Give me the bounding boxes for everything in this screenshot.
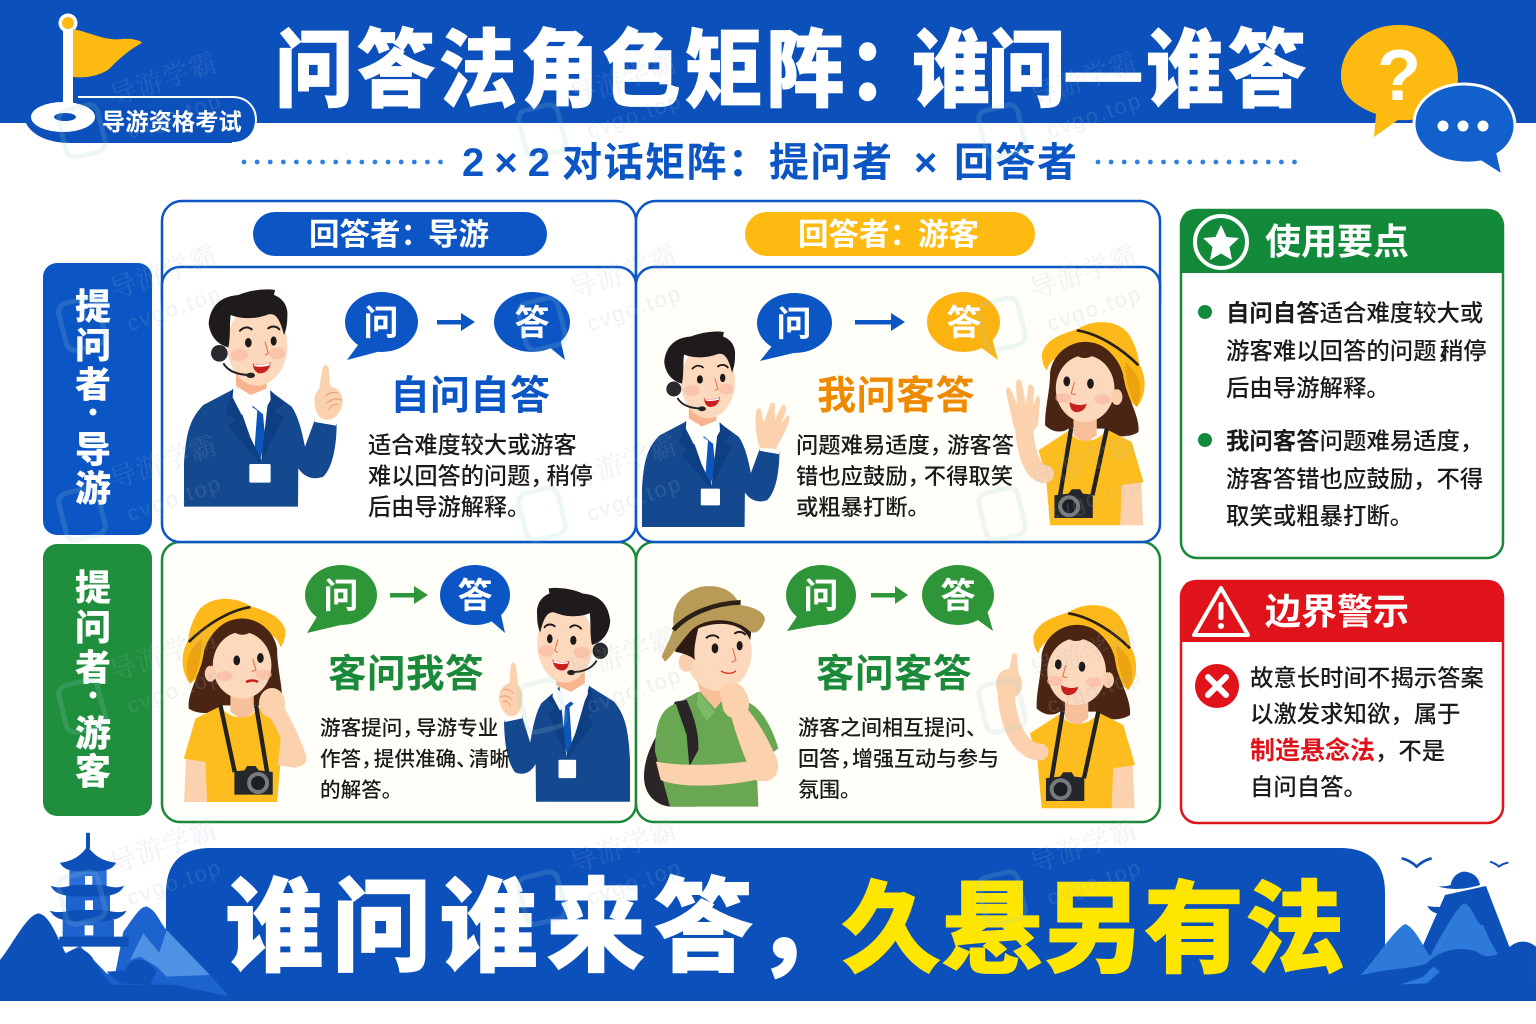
bubble: answer: 答 [514, 304, 550, 343]
panel: guide asks guide answers [162, 267, 636, 542]
illustration: guide pointing [499, 588, 630, 802]
description: 氛围。 [798, 779, 861, 802]
panel: guide asks tourist answers [636, 267, 1160, 542]
arrow [855, 313, 905, 331]
bullet: self question [1198, 300, 1487, 401]
illustration: female tourist pointing [996, 605, 1136, 808]
bubble: question [757, 293, 832, 361]
illustration: thinking tourist [183, 599, 303, 802]
warning text: 以激发求知欲，属于 [1250, 701, 1461, 727]
title: 谁答 [1146, 24, 1310, 119]
row tab: asker guide: 游 [75, 468, 111, 509]
slogan white: 谁问谁来答， [225, 872, 861, 985]
slogan yellow: 久悬另有法 [841, 874, 1346, 986]
panel: tourist asks guide answers [162, 542, 636, 822]
arrow [390, 586, 428, 604]
description: 游客之间相互提问、 [798, 717, 987, 740]
panel: boundary warning [1181, 580, 1503, 823]
bubble: question: 问 [363, 304, 399, 343]
row tab: asker tourist: 客 [75, 751, 111, 792]
icon: question and chat bubbles: ? [1377, 36, 1421, 116]
bubble: answer [927, 292, 1000, 360]
heading: 自问自答 [390, 374, 550, 418]
bullet: self question: 游客难以回答的问题，稍停 [1226, 338, 1487, 364]
description: 回答，增强互动与参与 [798, 748, 999, 771]
bubble: question [786, 565, 856, 631]
description [320, 717, 510, 802]
bullet: tourist answer: 我问客答问题难易适度， [1226, 427, 1483, 454]
row tab: asker guide: 问 [75, 325, 111, 366]
heading: 边界警示 [1265, 591, 1409, 632]
illustration: right mountains and birds [1330, 858, 1536, 1001]
description: 难以回答的问题，稍停 [368, 463, 593, 489]
panel: tourist asks tourist answers [636, 542, 1160, 822]
description: 或粗暴打断。 [796, 495, 930, 520]
warning text [1250, 665, 1484, 800]
bubble: question [345, 292, 418, 360]
subtitle [244, 141, 1297, 185]
title: 谁问 [912, 24, 1063, 119]
icon: star [1195, 216, 1247, 268]
row tab: asker guide: 者 [75, 364, 111, 405]
description [798, 717, 999, 802]
column header: answerer guide: 回答者：导游 [309, 218, 489, 252]
bubble: question: 问 [776, 305, 812, 344]
illustration: guide with open hand [642, 331, 790, 527]
row tab: asker tourist: 提 [75, 567, 111, 608]
panel header [1181, 209, 1503, 273]
header band [0, 0, 1536, 123]
description: 作答，提供准确、清晰 [320, 748, 510, 771]
row tab: asker tourist: 游 [75, 713, 111, 754]
bullet: tourist answer [1198, 427, 1483, 529]
row tab: asker guide [43, 263, 152, 535]
icon: question and chat bubbles [1341, 25, 1515, 176]
heading: 使用要点 [1265, 221, 1409, 262]
row tab: asker guide: 导 [75, 429, 111, 470]
arrow [437, 313, 475, 331]
bullet: self question: 自问自答适合难度较大或 [1226, 300, 1483, 326]
description: 的解答。 [320, 779, 402, 802]
warning text: 制造悬念法，不是 [1250, 736, 1445, 765]
panel: usage key points [1181, 209, 1503, 558]
illustration: pagoda and mountains [0, 833, 253, 1001]
bubble: answer [922, 565, 994, 631]
watermark layer [57, 47, 1153, 926]
description [368, 432, 593, 520]
subtitle: 2×2 [462, 141, 550, 185]
bubble: question [305, 565, 377, 633]
description: 游客提问，导游专业 [320, 717, 498, 740]
illustration: female tourist waving [1006, 322, 1145, 525]
icon: warning triangle [1194, 588, 1248, 635]
arrow [871, 586, 908, 604]
subtitle: 对话矩阵： [562, 141, 770, 185]
bubble: answer [440, 565, 510, 633]
heading: 客问我答 [328, 653, 484, 696]
description: 问题难易适度，游客答 [796, 433, 1014, 458]
footer banner [0, 848, 1536, 1001]
column header: answerer tourist [636, 201, 1160, 321]
column header: answerer guide [162, 201, 636, 321]
heading: 客问客答 [816, 653, 972, 696]
bubble: answer: 答 [940, 577, 976, 616]
bubble: answer: 答 [946, 304, 982, 343]
description: 错也应鼓励，不得取笑 [796, 464, 1013, 489]
bubble: question: 问 [323, 577, 359, 616]
subtitle: 回答者 [954, 141, 1078, 185]
description [796, 433, 1014, 520]
row tab: asker tourist: 者 [75, 647, 111, 688]
title: — [1066, 24, 1142, 118]
warning text: 自问自答。 [1250, 774, 1367, 800]
title: 问答法角色矩阵： [275, 24, 930, 119]
illustration: guide pointing [184, 289, 343, 507]
bubble: answer [494, 292, 570, 360]
bullet: tourist answer: 取笑或粗暴打断。 [1226, 503, 1413, 529]
logo: flag and exam badge: 导游资格考试 [102, 109, 242, 135]
description: 后由导游解释。 [368, 494, 530, 520]
panel header [1181, 580, 1503, 642]
bullet: tourist answer: 游客答错也应鼓励，不得 [1226, 466, 1483, 492]
logo: flag and exam badge [26, 14, 257, 143]
row tab: asker tourist: 问 [75, 607, 111, 648]
bubble: answer: 答 [457, 577, 493, 616]
heading: 我问客答 [817, 375, 975, 418]
subtitle: × [914, 141, 937, 185]
bullet: self question: 后由导游解释。 [1226, 375, 1390, 401]
row tab: asker tourist [43, 544, 152, 816]
subtitle: 提问者 [769, 141, 894, 185]
icon: cross [1195, 664, 1239, 708]
illustration: thinking male tourist [644, 586, 778, 807]
bubble: question: 问 [803, 577, 839, 616]
column header: answerer tourist: 回答者：游客 [798, 218, 979, 252]
row tab: asker guide: 提 [75, 286, 111, 327]
description: 适合难度较大或游客 [368, 432, 577, 458]
title [275, 24, 1310, 119]
warning text: 故意长时间不揭示答案 [1250, 665, 1484, 691]
